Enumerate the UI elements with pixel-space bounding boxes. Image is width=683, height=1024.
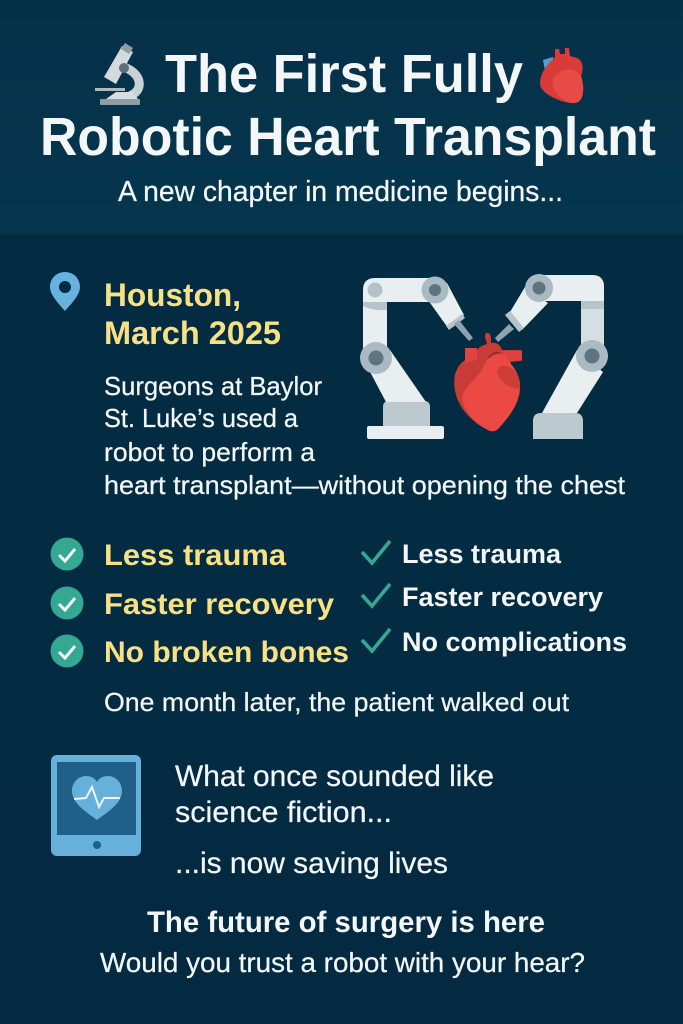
benefit labels: yellow: Faster recovery xyxy=(104,588,334,621)
text block: science fiction: ...is now saving lives xyxy=(175,847,448,880)
outcome labels: white: No complications xyxy=(402,627,627,657)
benefit labels: yellow: No broken bones xyxy=(104,636,349,669)
text block: science fiction: What once sounded like xyxy=(175,760,494,793)
text block: procedure description: robot to perform a xyxy=(104,437,316,467)
closing heading: The future of surgery is here xyxy=(147,906,545,939)
panel: header band xyxy=(0,0,683,234)
title xyxy=(40,44,656,167)
icon: microscope xyxy=(95,43,140,105)
benefit labels: yellow xyxy=(104,539,349,669)
icon: tablet with heart monitor xyxy=(51,755,141,856)
text block: science fiction: science fiction... xyxy=(175,796,392,829)
benefit labels: yellow: Less trauma xyxy=(104,539,286,572)
subtitle: A new chapter in medicine begins... xyxy=(118,176,563,208)
heading: location and date: March 2025 xyxy=(104,315,281,351)
illustration: robotic arms and heart xyxy=(360,274,608,439)
icon: circle check 1 xyxy=(50,538,84,570)
outcome labels: white xyxy=(402,539,627,657)
robot arm: left xyxy=(360,276,473,439)
icon: circle check 2 xyxy=(50,586,84,620)
text block: procedure description: Surgeons at Baylor xyxy=(104,371,322,401)
text block: procedure description xyxy=(104,371,626,500)
icon: location pin xyxy=(50,272,80,311)
icon: heart xyxy=(454,333,522,431)
robot arm: right xyxy=(495,274,608,439)
text block: procedure description: heart transplant—without opening the chest xyxy=(104,470,626,500)
heading: location and date xyxy=(104,277,281,351)
list: outcomes with plain checks xyxy=(362,539,627,657)
panel: page background xyxy=(0,234,683,1024)
icon: check marks xyxy=(362,541,390,651)
closing question: Would you trust a robot with your hear? xyxy=(100,947,585,978)
text block: science fiction xyxy=(175,760,494,880)
icon: anatomical heart emoji xyxy=(540,48,583,103)
text: patient outcome: One month later, the patient walked out xyxy=(104,687,570,717)
heading: location and date: Houston, xyxy=(104,277,241,313)
title: Robotic Heart Transplant xyxy=(40,107,656,167)
outcome labels: white: Less trauma xyxy=(402,539,562,569)
title: The First Fully xyxy=(165,44,523,104)
icon: circle check 3 xyxy=(50,634,84,668)
text block: procedure description: St. Luke’s used a xyxy=(104,403,299,433)
list: benefits with circle checks xyxy=(50,538,349,669)
outcome labels: white: Faster recovery xyxy=(402,582,603,612)
